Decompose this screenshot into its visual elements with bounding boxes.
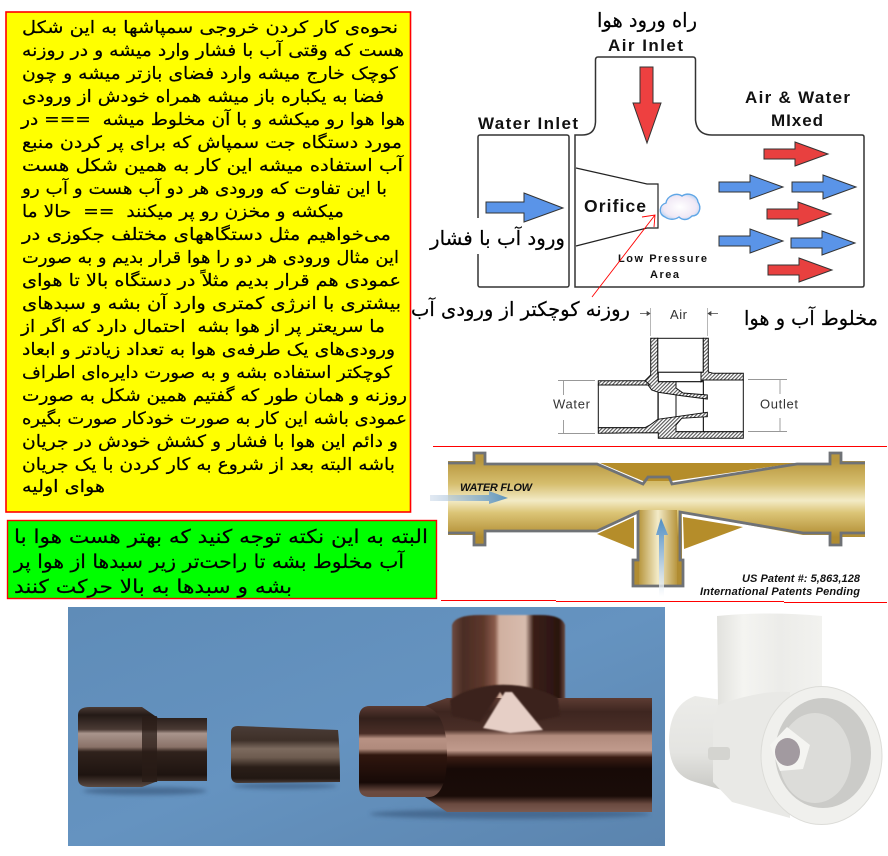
text block: note on mixing air with water: بشه و سبدها به بالا حرکت کنند <box>14 576 292 598</box>
text block: how the jet works: عمودی هم قرار بدیم مثلاً در دستگاه بالا تا هوای <box>22 269 401 291</box>
copper reducer <box>78 707 207 787</box>
labels: English captions <box>478 36 850 281</box>
cavity <box>775 698 871 808</box>
dimension: air: Air <box>670 307 688 322</box>
tee collar <box>359 706 447 797</box>
text block: how the jet works: نحوه‌ی کار کردن خروجی سمپاشها به این شکل <box>22 18 398 38</box>
text block: how the jet works: هوای اولیه <box>22 477 105 497</box>
text block: note on mixing air with water: البته به این نکته توجه کنید که بهتر هست هوا با <box>14 526 428 548</box>
arrow: air going down <box>633 67 661 143</box>
outline: T body with air inlet <box>575 57 864 287</box>
top gold wedge <box>600 463 797 481</box>
text block: note on mixing air with water: آب مخلوط بشه تا راحت‌تر زیر سبدها از هوا پر <box>13 549 405 573</box>
dimension: outlet <box>748 380 798 432</box>
label: orifice smaller than inlet: روزنه کوچکتر از ورودی آب <box>411 296 630 321</box>
label: patent note <box>700 573 861 598</box>
text block: note on mixing air with water <box>13 526 428 598</box>
grey pipe walls <box>448 453 865 586</box>
panel: green note <box>8 520 436 598</box>
label: patent note: International Patents Pending <box>700 586 860 598</box>
dimension: water: Water <box>553 396 591 412</box>
label: pressurised water inlet: ورود آب با فشار <box>429 225 565 250</box>
diagram: brass venturi injector <box>430 453 865 598</box>
white stub <box>669 696 722 790</box>
text block: how the jet works: فضا به یکباره باز میشه همراه خودش از ورودی <box>22 87 384 107</box>
photo: copper fittings on blue background <box>68 607 665 846</box>
text block: how the jet works: کوچک خارج میشه وارد فضای بازتر میشه و چون <box>22 64 399 84</box>
copper nipple <box>231 726 340 783</box>
text block: how the jet works: میکشه و مخزن رو پر میکنند == حالا ما <box>22 202 344 222</box>
text block: how the jet works: و دائم این هوا با فشار و کشش خودش در جریان <box>22 432 398 452</box>
labels: English captions: Water Inlet <box>478 114 578 133</box>
labels: English captions: Air & Water <box>745 88 850 107</box>
text block: how the jet works: ما سریعتر پر از هوا بشه احتمال دارد که اگر از <box>20 316 385 337</box>
photo: white plastic injector <box>669 614 882 824</box>
text block: how the jet works: هست که وقتی آب با فشار وارد میشه و در روزنه <box>22 39 404 61</box>
label: pressurised water inlet <box>428 218 565 254</box>
text block: how the jet works: این مثال ورودی هر دو را هوا قرار بدیم و به صورت <box>22 248 399 268</box>
outline: water inlet chamber <box>478 135 569 287</box>
arrow: thin red pointer to orifice <box>592 215 655 297</box>
diagram: injector cross-section <box>553 307 798 438</box>
labels: English captions: Orifice <box>584 196 646 216</box>
text block: how the jet works <box>20 18 407 497</box>
junction highlight <box>483 692 543 733</box>
dimension: outlet: Outlet <box>760 396 798 412</box>
text block: how the jet works: هوا هوا رو میکشه و با آن مخلوط میشه === در <box>20 108 405 130</box>
brass pipe body <box>448 453 865 587</box>
text block: how the jet works: باشه البته بعد از شروع به کار کردن با یک جریان <box>22 455 395 475</box>
label: patent note: US Patent #: 5,863,128 <box>742 573 861 585</box>
white disc <box>761 686 882 824</box>
orifice nozzle <box>576 168 658 246</box>
tee body <box>425 698 652 812</box>
tee stem <box>452 615 565 700</box>
arrow: vertical air flow <box>656 518 668 597</box>
label: air and water mixture: مخلوط آب و هوا <box>744 305 878 330</box>
white stem <box>717 614 822 706</box>
label: air inlet in Persian: راه ورود هوا <box>597 8 697 32</box>
text block: how the jet works: روزنه و همان طور که گفتیم همین شکل به صورت <box>22 385 407 406</box>
labels: English captions: MIxed <box>771 111 823 130</box>
arrow: horizontal water flow <box>430 491 508 504</box>
arrows: mixed flow <box>719 142 856 282</box>
text block: how the jet works: کوچکتر استفاده بشه و به صورت دایره‌ای اطراف <box>22 363 393 383</box>
shadows <box>83 783 650 819</box>
bottom left gold wedge <box>597 517 634 549</box>
text block: how the jet works: مورد دستگاه جت سمپاش که برای پر کردن منبع <box>22 132 402 153</box>
dimension: air <box>640 307 718 336</box>
icon: air bubble cloud <box>660 194 700 220</box>
white body <box>713 692 790 818</box>
text block: how the jet works: می‌خواهیم مثل دستگاههای مختلف جکوزی در <box>21 224 391 245</box>
panel: yellow explanation text <box>6 12 410 512</box>
arrow: water entering <box>486 193 563 222</box>
text block: how the jet works: عمودی باشه این کار به صورت خودکار صورت بگیره <box>22 408 407 429</box>
junction saddle <box>450 685 560 724</box>
dimension: water <box>553 380 595 434</box>
diagram: air and water flow through the orifice <box>411 8 878 330</box>
hex nozzle <box>770 727 810 771</box>
text block: how the jet works: آب استفاده میشه این کار به همین شکل هست <box>22 154 404 176</box>
label: water flow: WATER FLOW <box>460 482 534 494</box>
text block: how the jet works: بیشتری با انرژی کمتری وارد آن بشه و سبدهای <box>22 292 401 314</box>
labels: English captions: Low Pressure <box>618 253 707 265</box>
copper tee <box>359 615 652 812</box>
fitting body <box>598 338 743 438</box>
white tab <box>708 747 730 760</box>
labels: English captions: Air Inlet <box>608 36 683 55</box>
divider lines <box>433 446 887 602</box>
text block: how the jet works: ورودی‌های یک طرفه‌ی هوا به تعداد زیادتر و ابعاد <box>22 340 395 360</box>
throat stem <box>639 510 677 586</box>
nozzle hole <box>775 738 800 766</box>
bottom right gold wedge <box>683 517 743 549</box>
labels: English captions: Area <box>650 269 680 281</box>
text block: how the jet works: با این تفاوت که ورودی هر دو آب هست و آب رو <box>21 177 387 199</box>
